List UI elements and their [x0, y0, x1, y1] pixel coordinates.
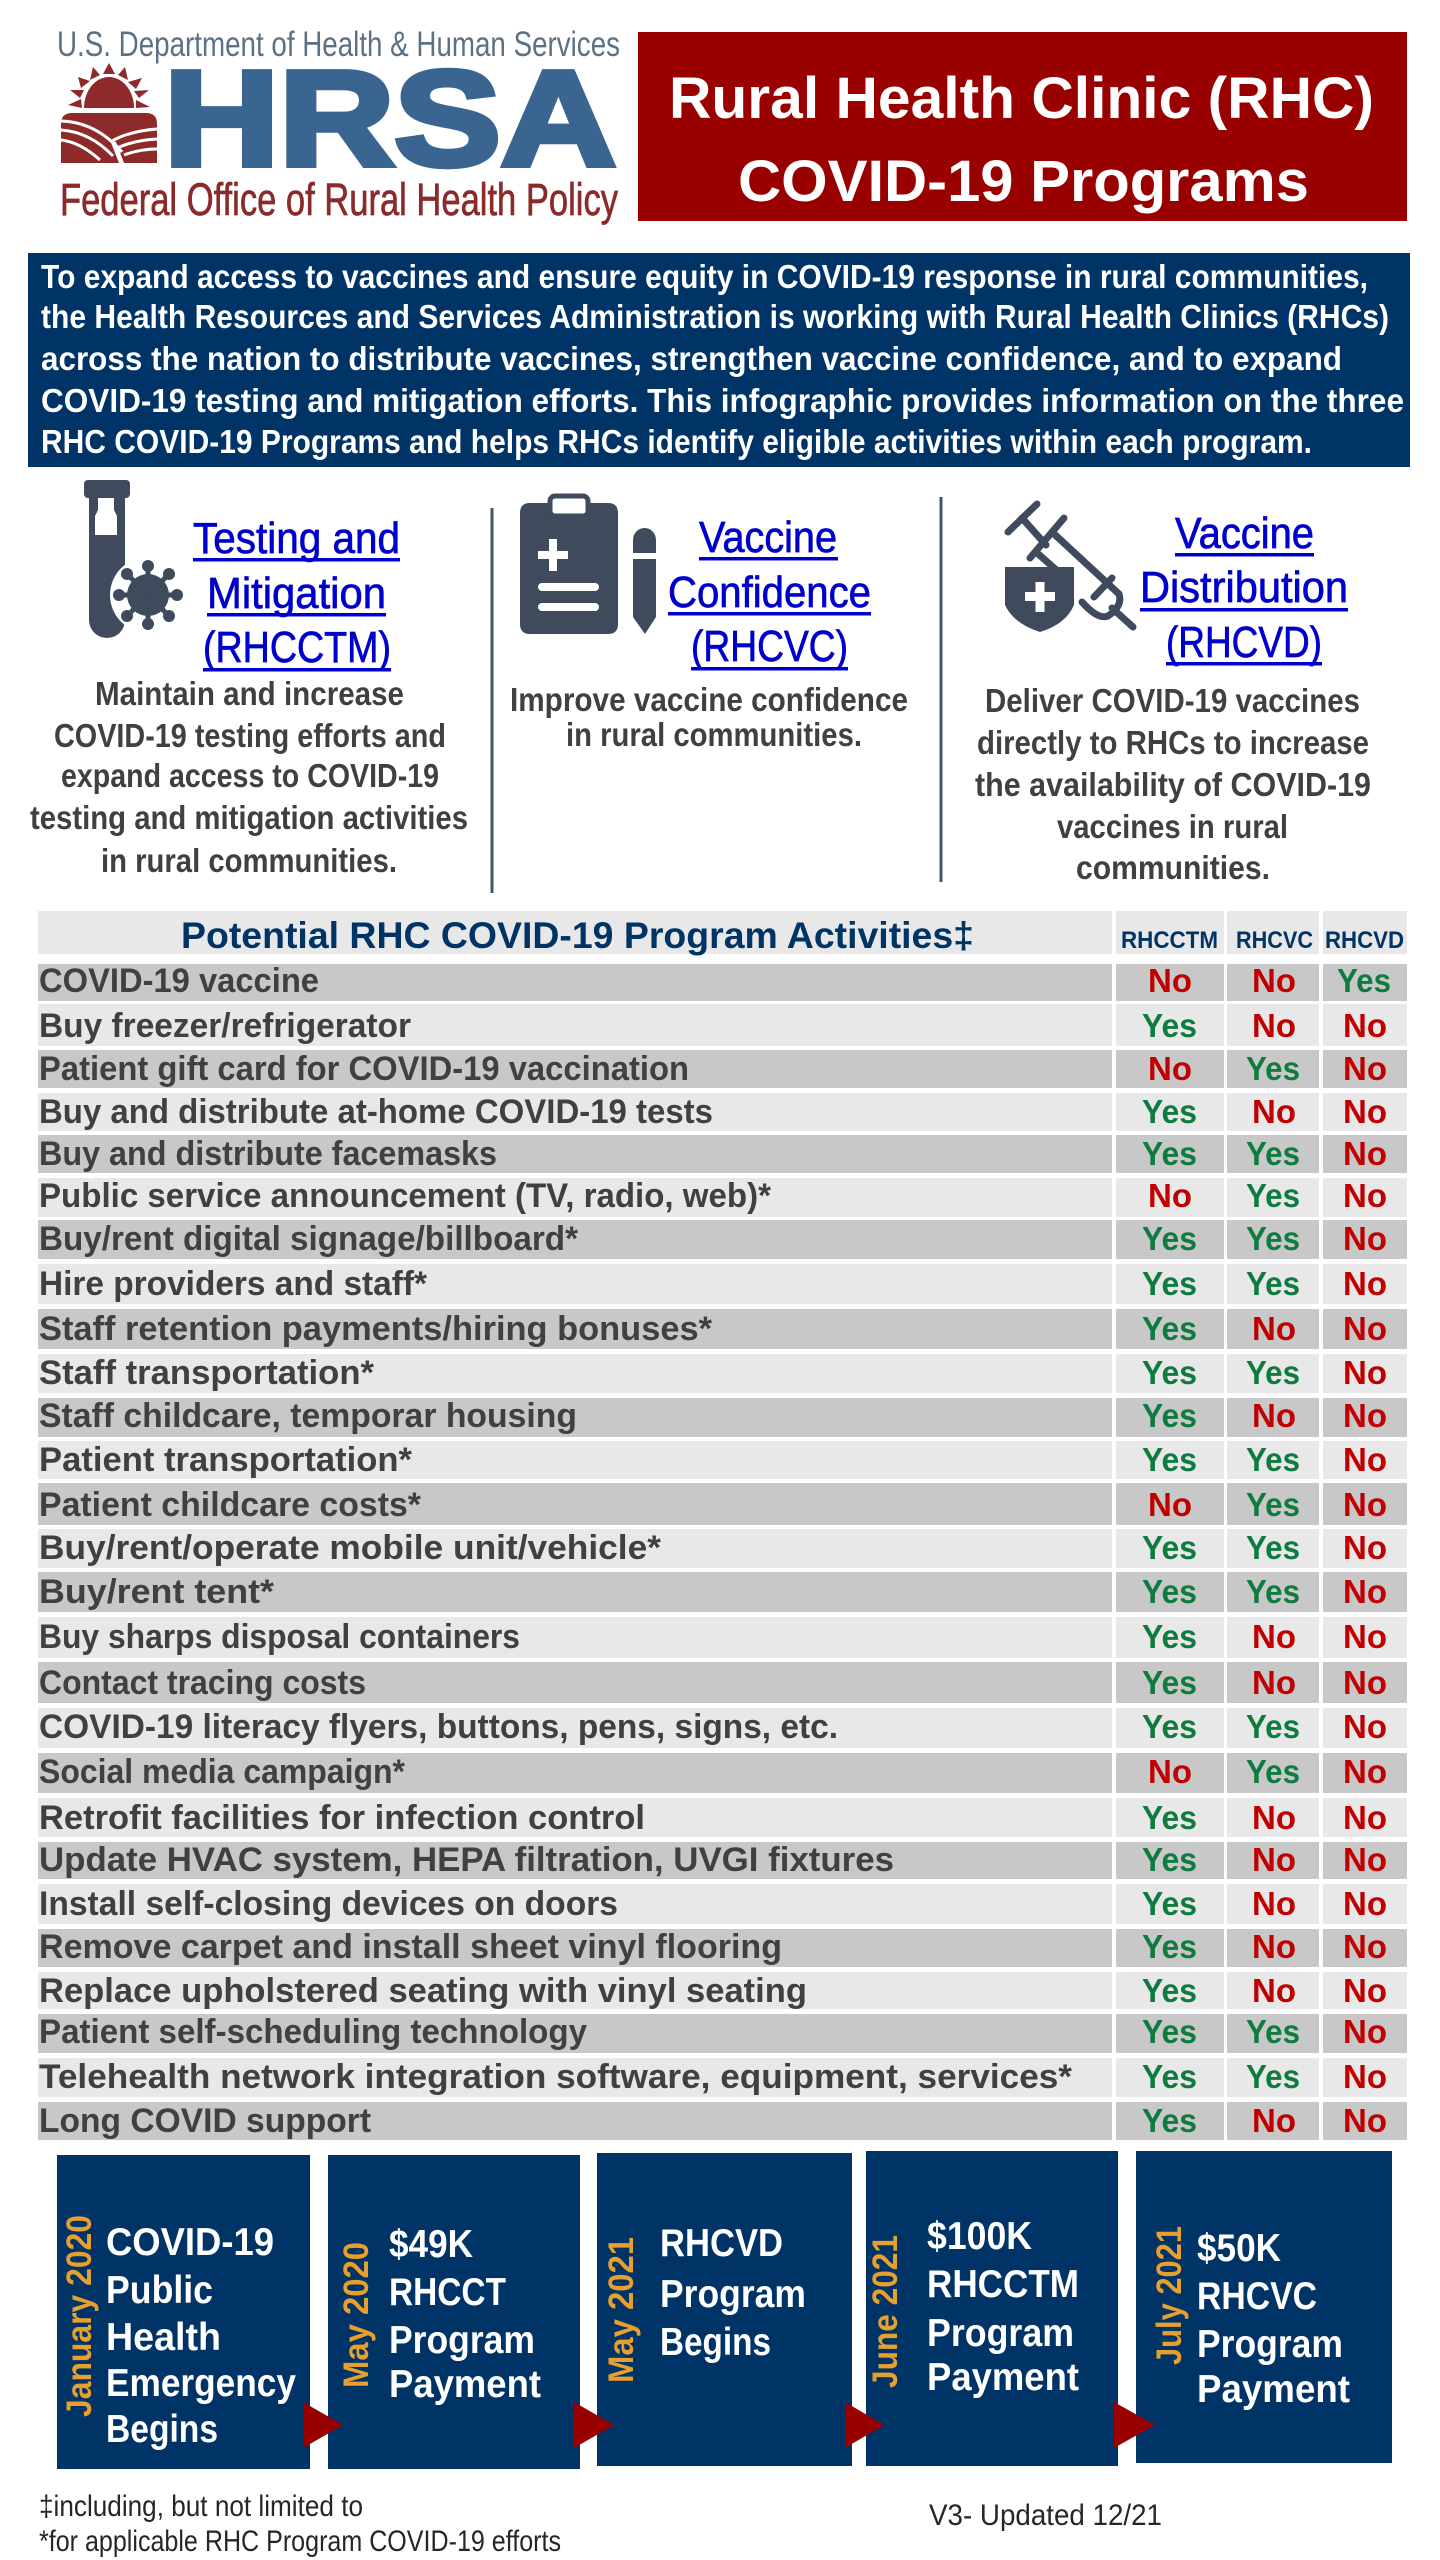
title text: COVID-19 Programs: [738, 149, 1309, 214]
row: tent: Yes: [1246, 1573, 1300, 1610]
footnotes: *for applicable RHC Program COVID-19 efforts: [39, 2525, 561, 2558]
description: vaccines in rural: [1057, 808, 1288, 845]
description: [975, 682, 1371, 886]
row: retrofit facilities: No: [1343, 1799, 1387, 1836]
timeline box: July 2021: $50K: [1197, 2227, 1281, 2270]
link heading: [1140, 509, 1348, 667]
row: staff retention: [38, 1309, 1407, 1349]
icon: clipboard and pen: [520, 496, 656, 634]
row: staff transportation: Yes: [1142, 1354, 1197, 1391]
row: digital signage: Yes: [1246, 1220, 1300, 1257]
row: public service announcement: No: [1148, 1177, 1192, 1214]
row: staff transportation: Yes: [1246, 1354, 1300, 1391]
timeline box: January 2020: January 2020: [60, 2215, 99, 2417]
row: remove carpet: No: [1252, 1928, 1296, 1965]
table header: RHCVC: [1236, 927, 1313, 954]
description: directly to RHCs to increase: [977, 724, 1369, 761]
row: retrofit facilities: Retrofit facilities for infection control: [39, 1799, 645, 1837]
timeline box: July 2021: RHCVC: [1197, 2275, 1317, 2318]
row: staff childcare: Staff childcare, temporar housing: [39, 1397, 577, 1435]
row: self-scheduling: [38, 2013, 1407, 2053]
office name: Federal Office of Rural Health Policy: [60, 174, 618, 225]
row: freezer: Yes: [1142, 1007, 1197, 1044]
row: telehealth: Yes: [1142, 2058, 1197, 2095]
footnotes: ‡including, but not limited to: [39, 2490, 363, 2523]
row: contact tracing: [38, 1662, 1407, 1703]
row: staff childcare: Yes: [1142, 1397, 1197, 1434]
row: social media: [38, 1753, 1407, 1793]
description: COVID-19 testing efforts and: [54, 717, 446, 754]
row: mobile unit: [38, 1529, 1407, 1568]
timeline box: May 2020: RHCCT: [389, 2271, 506, 2314]
row: upholstered seating: Replace upholstered seating with vinyl seating: [39, 1972, 807, 2010]
description: [510, 681, 908, 753]
timeline box: January 2020: Health: [106, 2316, 221, 2359]
row: social media: Social media campaign*: [39, 1753, 406, 1791]
intro text: across the nation to distribute vaccines, strengthen vaccine confidence, and to expand: [41, 340, 1342, 377]
row: at-home tests: No: [1343, 1093, 1387, 1130]
row: digital signage: Yes: [1142, 1220, 1197, 1257]
row: literacy flyers: COVID-19 literacy flyers, buttons, pens, signs, etc.: [39, 1708, 838, 1746]
row: staff childcare: No: [1343, 1397, 1387, 1434]
row: patient transportation: [38, 1441, 1407, 1479]
timeline box: May 2021: Begins: [660, 2321, 771, 2364]
arrow 2: [574, 2402, 614, 2448]
row: contact tracing: No: [1343, 1664, 1387, 1701]
row: sharps containers: Yes: [1142, 1618, 1197, 1655]
timeline: [57, 2151, 1392, 2469]
link heading: (RHCVC): [691, 622, 848, 671]
link heading: [668, 513, 871, 671]
row: staff retention: No: [1343, 1310, 1387, 1347]
description: expand access to COVID-19: [61, 757, 439, 794]
row: self-scheduling: Yes: [1142, 2013, 1197, 2050]
link heading: Distribution: [1140, 563, 1348, 612]
row: long COVID: Long COVID support: [39, 2102, 371, 2140]
link heading: Confidence: [668, 568, 871, 617]
row: digital signage: No: [1343, 1220, 1387, 1257]
icon: test tube with virus: [84, 480, 186, 638]
row: self-closing devices: No: [1252, 1885, 1296, 1922]
description: Maintain and increase: [95, 675, 404, 712]
row: patient childcare: [38, 1483, 1407, 1525]
arrow 3: [845, 2402, 884, 2448]
row: freezer: [38, 1004, 1407, 1046]
row: literacy flyers: Yes: [1142, 1708, 1197, 1745]
row: HVAC: Yes: [1142, 1841, 1197, 1878]
description: Improve vaccine confidence: [510, 681, 908, 718]
row: self-closing devices: [38, 1884, 1407, 1924]
timeline box: May 2021: Program: [660, 2273, 806, 2316]
row: gift card: No: [1343, 1050, 1387, 1087]
row: sharps containers: No: [1252, 1618, 1296, 1655]
row: sharps containers: No: [1343, 1618, 1387, 1655]
row: retrofit facilities: No: [1252, 1799, 1296, 1836]
row: tent: Yes: [1142, 1573, 1197, 1610]
row: tent: No: [1343, 1573, 1387, 1610]
row: patient childcare: Yes: [1246, 1486, 1300, 1523]
row: retrofit facilities: Yes: [1142, 1799, 1197, 1836]
description: testing and mitigation activities: [30, 799, 468, 836]
timeline box: May 2021: [597, 2153, 852, 2466]
row: upholstered seating: No: [1252, 1972, 1296, 2009]
row: patient childcare: No: [1343, 1486, 1387, 1523]
link heading: Vaccine: [1175, 509, 1314, 558]
row: at-home tests: Buy and distribute at-home COVID-19 tests: [39, 1093, 713, 1131]
link heading: Testing and: [193, 514, 400, 563]
row: hire providers: Yes: [1142, 1265, 1197, 1302]
row: long COVID: No: [1252, 2102, 1296, 2139]
version note: V3- Updated 12/21: [929, 2499, 1162, 2532]
timeline box: July 2021: Payment: [1197, 2368, 1350, 2411]
footnotes: [39, 2490, 561, 2558]
link heading: (RHCCTM): [203, 623, 391, 672]
row: gift card: No: [1148, 1050, 1192, 1087]
row: COVID-19 vaccine: [38, 962, 1407, 1001]
row: sharps containers: [38, 1617, 1407, 1658]
timeline box: July 2021: Program: [1197, 2323, 1343, 2366]
row: patient childcare: Patient childcare costs*: [39, 1486, 422, 1524]
table header: RHCVD: [1325, 927, 1404, 954]
row: upholstered seating: Yes: [1142, 1972, 1197, 2009]
row: facemasks: No: [1343, 1135, 1387, 1172]
row: HVAC: [38, 1841, 1407, 1879]
row: at-home tests: Yes: [1142, 1093, 1197, 1130]
row: literacy flyers: Yes: [1246, 1708, 1300, 1745]
row: remove carpet: Yes: [1142, 1928, 1197, 1965]
row: mobile unit: Yes: [1246, 1529, 1300, 1566]
row: remove carpet: Remove carpet and install sheet vinyl flooring: [39, 1928, 782, 1966]
table header: Potential RHC COVID-19 Program Activities‡: [181, 915, 974, 956]
row: facemasks: Buy and distribute facemasks: [39, 1135, 497, 1173]
timeline box: June 2021: Program: [927, 2312, 1074, 2355]
row: staff transportation: [38, 1354, 1407, 1393]
arrow 1: [303, 2402, 343, 2448]
row: COVID-19 vaccine: No: [1252, 962, 1296, 999]
row: staff transportation: No: [1343, 1354, 1387, 1391]
timeline box: June 2021: Payment: [927, 2356, 1079, 2399]
title text: Rural Health Clinic (RHC): [669, 66, 1374, 131]
row: facemasks: [38, 1135, 1407, 1173]
row: social media: No: [1343, 1753, 1387, 1790]
row: telehealth: Telehealth network integration software, equipment, services*: [39, 2058, 1073, 2096]
timeline box: May 2020: May 2020: [337, 2242, 376, 2388]
timeline box: June 2021: June 2021: [866, 2235, 905, 2388]
row: contact tracing: Yes: [1142, 1664, 1197, 1701]
row: long COVID: [38, 2102, 1407, 2140]
link heading: Mitigation: [207, 569, 386, 618]
timeline box: July 2021: [1136, 2151, 1392, 2463]
timeline box: January 2020: COVID-19: [106, 2221, 274, 2264]
row: telehealth: No: [1343, 2058, 1387, 2095]
row: self-closing devices: Install self-closing devices on doors: [39, 1885, 618, 1923]
row: staff childcare: [38, 1397, 1407, 1437]
timeline box: May 2020: Payment: [389, 2363, 541, 2406]
row: gift card: [38, 1050, 1407, 1088]
row: long COVID: No: [1343, 2102, 1387, 2139]
row: freezer: Buy freezer/refrigerator: [39, 1007, 411, 1045]
timeline box: June 2021: $100K: [927, 2215, 1032, 2258]
row: hire providers: No: [1343, 1265, 1387, 1302]
row: long COVID: Yes: [1142, 2102, 1197, 2139]
timeline box: January 2020: Public: [106, 2269, 213, 2312]
row: telehealth: Yes: [1246, 2058, 1300, 2095]
panel: testing and mitigation: [30, 480, 468, 879]
timeline box: May 2020: $49K: [389, 2223, 473, 2266]
row: mobile unit: Yes: [1142, 1529, 1197, 1566]
row: self-scheduling: Patient self-scheduling technology: [39, 2013, 587, 2051]
row: facemasks: Yes: [1142, 1135, 1197, 1172]
HRSA wordmark: HRSA: [164, 43, 616, 194]
link heading: (RHCVD): [1166, 618, 1322, 667]
table header: RHCCTM: [1121, 927, 1218, 954]
row: COVID-19 vaccine: COVID-19 vaccine: [39, 962, 319, 1000]
row: at-home tests: No: [1252, 1093, 1296, 1130]
row: at-home tests: [38, 1093, 1407, 1131]
row: hire providers: Hire providers and staff*: [39, 1265, 428, 1303]
intro text: RHC COVID-19 Programs and helps RHCs identify eligible activities within each program.: [41, 423, 1312, 460]
timeline box: May 2021: May 2021: [602, 2237, 641, 2383]
panel: vaccine distribution: [975, 504, 1371, 886]
description: in rural communities.: [101, 842, 397, 879]
title text: [669, 66, 1374, 214]
link heading: [193, 514, 400, 672]
panel: vaccine confidence: [510, 496, 908, 753]
row: remove carpet: [38, 1928, 1407, 1967]
timeline box: July 2021: July 2021: [1150, 2226, 1189, 2365]
timeline box: May 2020: [328, 2155, 580, 2469]
timeline box: May 2021: RHCVD: [660, 2222, 783, 2265]
row: staff childcare: No: [1252, 1397, 1296, 1434]
row: upholstered seating: No: [1343, 1972, 1387, 2009]
icon: syringe and shield: [1005, 504, 1133, 632]
row: patient transportation: No: [1343, 1441, 1387, 1478]
timeline box: June 2021: [866, 2151, 1118, 2466]
intro panel: [28, 253, 1410, 467]
row: COVID-19 vaccine: No: [1148, 962, 1192, 999]
row: gift card: Yes: [1246, 1050, 1300, 1087]
row: social media: No: [1148, 1753, 1192, 1790]
row: HVAC: No: [1343, 1841, 1387, 1878]
row: social media: Yes: [1246, 1753, 1300, 1790]
row: literacy flyers: No: [1343, 1708, 1387, 1745]
row: hire providers: [38, 1264, 1407, 1304]
row: patient transportation: Yes: [1246, 1441, 1300, 1478]
table header: [38, 911, 1407, 956]
row: public service announcement: Yes: [1246, 1177, 1300, 1214]
row: contact tracing: Contact tracing costs: [39, 1664, 366, 1702]
title banner: [638, 32, 1407, 221]
timeline box: January 2020: [57, 2155, 310, 2469]
intro text: COVID-19 testing and mitigation efforts. This infographic provides information on the three: [41, 382, 1404, 419]
row: staff transportation: Staff transportation*: [39, 1354, 375, 1392]
HRSA logo: [57, 25, 620, 225]
row: digital signage: [38, 1220, 1407, 1259]
row: self-scheduling: Yes: [1246, 2013, 1300, 2050]
row: staff retention: No: [1252, 1310, 1296, 1347]
description: the availability of COVID-19: [975, 766, 1371, 803]
row: freezer: No: [1252, 1007, 1296, 1044]
activities table: [38, 911, 1407, 2140]
row: facemasks: Yes: [1246, 1135, 1300, 1172]
row: self-closing devices: No: [1343, 1885, 1387, 1922]
timeline box: January 2020: Emergency: [106, 2362, 296, 2405]
description: in rural communities.: [566, 716, 862, 753]
intro text: [41, 258, 1404, 460]
row: public service announcement: Public service announcement (TV, radio, web)*: [39, 1177, 772, 1215]
timeline box: June 2021: RHCCTM: [927, 2263, 1079, 2306]
description: Deliver COVID-19 vaccines: [985, 682, 1360, 719]
row: HVAC: No: [1252, 1841, 1296, 1878]
row: patient childcare: No: [1148, 1486, 1192, 1523]
description: communities.: [1076, 849, 1270, 886]
row: hire providers: Yes: [1246, 1265, 1300, 1302]
row: gift card: Patient gift card for COVID-19 vaccination: [39, 1050, 689, 1088]
description: [30, 675, 468, 879]
row: staff retention: Staff retention payments/hiring bonuses*: [39, 1310, 713, 1348]
row: public service announcement: [38, 1177, 1407, 1217]
row: upholstered seating: [38, 1972, 1407, 2010]
row: tent: [38, 1572, 1407, 1612]
row: sharps containers: Buy sharps disposal containers: [39, 1618, 520, 1656]
timeline box: January 2020: Begins: [106, 2408, 218, 2451]
row: COVID-19 vaccine: Yes: [1337, 962, 1391, 999]
row: staff retention: Yes: [1142, 1310, 1197, 1347]
row: self-closing devices: Yes: [1142, 1885, 1197, 1922]
row: mobile unit: Buy/rent/operate mobile unit/vehicle*: [39, 1529, 662, 1567]
icon: sun over farm fields: [61, 63, 157, 163]
row: self-scheduling: No: [1343, 2013, 1387, 2050]
row: public service announcement: No: [1343, 1177, 1387, 1214]
arrow 4: [1114, 2402, 1155, 2448]
link heading: Vaccine: [699, 513, 837, 562]
row: remove carpet: No: [1343, 1928, 1387, 1965]
row: HVAC: Update HVAC system, HEPA filtration, UVGI fixtures: [39, 1841, 894, 1879]
row: tent: Buy/rent tent*: [39, 1573, 275, 1611]
row: contact tracing: No: [1252, 1664, 1296, 1701]
row: mobile unit: No: [1343, 1529, 1387, 1566]
timeline box: May 2020: Program: [389, 2319, 535, 2362]
row: patient transportation: Patient transportation*: [39, 1441, 413, 1479]
row: patient transportation: Yes: [1142, 1441, 1197, 1478]
row: freezer: No: [1343, 1007, 1387, 1044]
row: retrofit facilities: [38, 1798, 1407, 1837]
row: literacy flyers: [38, 1708, 1407, 1748]
row: digital signage: Buy/rent digital signage/billboard*: [39, 1220, 579, 1258]
department name: U.S. Department of Health & Human Services: [57, 25, 620, 64]
